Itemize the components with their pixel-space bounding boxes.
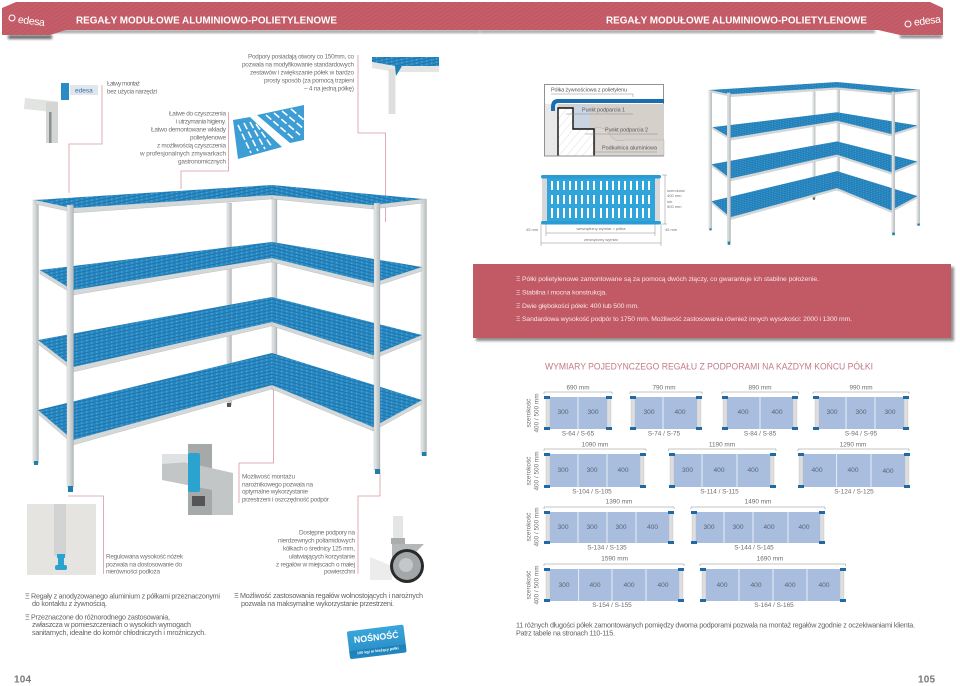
diagram: S-84 / S-85: 890 mm <box>748 385 772 392</box>
bullets: left column 1: Regały z anodyzowanego aluminium z półkami przeznaczonymi <box>31 591 220 600</box>
text: corner mounting: przestrzeni i oszczędność podpór <box>242 497 330 504</box>
text: castors <box>276 530 355 576</box>
photo: large corner shelving unit <box>33 185 426 492</box>
diagram: S-114 / S-115: 300 <box>682 467 693 474</box>
panel: red feature list: Ξ <box>516 303 521 310</box>
diagram: S-134 / S-135: S-134 / S-135 <box>587 545 627 552</box>
shelf level 3 <box>73 322 272 372</box>
axis labels: width: 400 / 500 mm <box>534 507 541 547</box>
header banner: left page <box>2 2 480 39</box>
shelf level 1 <box>72 195 272 213</box>
panel: red feature list: Ξ <box>516 289 521 296</box>
text: castors: nierdzewnych poliamidowych <box>278 538 355 545</box>
text: footnote: Patrz tabele na stronach 110-115. <box>516 628 615 637</box>
page number 105: 105 <box>918 675 935 686</box>
text: castors: kółkach o średnicy 125 mm, <box>283 546 355 553</box>
text: support holes: pozwala na modyfikowanie standardowych <box>242 62 354 69</box>
logo: edesa left: edesa <box>17 14 46 29</box>
diagram: S-164 / S-165 <box>700 556 846 609</box>
text: easy cleaning: i utrzymania higieny. <box>176 119 226 126</box>
plan diagram: shelf dimensions <box>526 175 685 246</box>
diagram: S-74 / S-75: 300 <box>643 409 655 416</box>
text: castors: ułatwiających korzystanie <box>289 554 355 561</box>
diagram: S-94 / S-95: 300 <box>855 409 867 416</box>
axis labels: width: 400 / 500 mm <box>534 393 541 433</box>
axis labels: width: szerokość <box>526 398 533 427</box>
diagram: S-84 / S-85 <box>722 385 798 438</box>
bullets: left column 1: Ξ <box>25 591 30 600</box>
badge: load capacity: 100 kg/ m bieżący półki <box>357 646 399 655</box>
diagram: S-94 / S-95 <box>813 385 909 438</box>
photo: shelf bracket with edesa label: edesa <box>75 88 93 95</box>
axis labels: width: 400 / 500 mm <box>534 451 541 491</box>
panel: red feature list: Półki polietylenowe zamontowane są za pomocą dwóch złączy, co gwarantuje ich stabilne położenie. <box>522 276 819 283</box>
logo: edesa right: edesa <box>913 14 942 29</box>
diagram: S-84 / S-85: 400 <box>737 409 749 416</box>
diagram: S-114 / S-115: 400 <box>713 467 725 474</box>
plan diagram: shelf dimensions: 500 mm <box>667 204 682 209</box>
diagram: S-144 / S-145: 300 <box>703 524 715 531</box>
diagram: S-154 / S-155 <box>544 556 684 609</box>
plan diagram: shelf dimensions: 45 mm <box>665 227 678 232</box>
text: footnote <box>516 620 915 637</box>
text: castors: powierzchni <box>324 569 355 576</box>
photo: small corner shelving unit <box>709 82 920 245</box>
bullets: left column 2 <box>234 591 423 608</box>
page number 104: 104 <box>14 675 31 686</box>
diagram: S-104 / S-105: 300 <box>557 467 569 474</box>
text: support holes: prosty sposób (za pomocą trzpieni <box>264 78 354 85</box>
bullets: left column 1: sanitarnych, idealne do komór chłodniczych i mroźniczych. <box>32 628 206 637</box>
diagram: S-114 / S-115: 400 <box>747 467 759 474</box>
diagram: S-104 / S-105 <box>544 442 646 496</box>
badge: load capacity <box>347 625 407 659</box>
text: adjustable feet: Regulowana wysokość nóżek <box>106 554 184 561</box>
diagram: S-94 / S-95: 300 <box>884 409 896 416</box>
diagram: S-124 / S-125: S-124 / S-125 <box>834 489 874 496</box>
diagram: S-94 / S-95: S-94 / S-95 <box>845 431 878 438</box>
diagram: S-64 / S-65: 690 mm <box>566 385 590 392</box>
text: easy assembly: bez użycia narzędzi <box>107 89 157 96</box>
diagram: S-104 / S-105: S-104 / S-105 <box>572 489 612 496</box>
panel: red feature list <box>473 264 954 341</box>
front posts <box>67 205 74 487</box>
section diagram: shelf fixing <box>544 84 664 156</box>
text: easy assembly: Łatwy montaż <box>107 81 140 88</box>
diagram: S-124 / S-125: 400 <box>847 467 859 474</box>
shelf level 2 <box>73 258 272 295</box>
bullets: left column 1: Ξ <box>25 612 30 621</box>
text: adjustable feet: nierówności podłoża <box>106 569 160 576</box>
badge: load capacity: NOŚNOŚĆ <box>353 629 400 645</box>
diagram: S-154 / S-155: 300 <box>558 582 570 589</box>
diagram: S-64 / S-65: 300 <box>557 409 569 416</box>
diagram: S-74 / S-75: S-74 / S-75 <box>648 431 681 438</box>
diagram: S-124 / S-125: 1290 mm <box>840 442 866 449</box>
panel: red feature list: Ξ <box>516 276 521 283</box>
section diagram: shelf fixing: Punkt podparcia 2 <box>605 127 648 133</box>
diagram: S-164 / S-165: 1690 mm <box>757 556 783 563</box>
diagram: S-164 / S-165: 400 <box>750 582 762 589</box>
diagram: S-144 / S-145: 300 <box>732 524 744 531</box>
panel: red feature list: Stabilna i mocna konstrukcja. <box>522 289 607 296</box>
diagram: S-154 / S-155: 400 <box>657 582 669 589</box>
diagram: S-114 / S-115: 1190 mm <box>709 442 735 449</box>
diagram: S-144 / S-145 <box>691 499 825 552</box>
text: support holes: zestawów i zwiększanie półek w bardzo <box>250 70 354 77</box>
bullets: left column 2: pozwala na maksymalne wykorzystanie przestrzeni. <box>241 599 394 608</box>
text: support holes: Podpory posiadają otwory co 150mm, co <box>248 54 354 61</box>
diagram: S-94 / S-95: 300 <box>826 409 838 416</box>
text: easy cleaning: Łatwo demontowane wkłady <box>151 127 227 134</box>
feet <box>34 461 38 465</box>
axis labels: width <box>526 393 541 605</box>
diagram: S-164 / S-165: 400 <box>716 582 728 589</box>
diagram: S-154 / S-155: 400 <box>589 582 601 589</box>
diagram: S-94 / S-95: 990 mm <box>849 385 873 392</box>
photo: removable polyethylene inserts <box>233 105 304 159</box>
text: footnote: 11 różnych długości półek zamontowanych pomiędzy dwoma podporami pozwala na montaż regałów zgodnie z oczekiwaniami klienta. <box>516 620 915 629</box>
section diagram: shelf fixing: Podkułnica aluminiowa <box>602 145 657 151</box>
photo: castor wheel <box>370 516 424 583</box>
diagram: S-134 / S-135: 300 <box>557 524 569 531</box>
diagram: S-154 / S-155: S-154 / S-155 <box>592 602 632 609</box>
diagram: S-154 / S-155: 1590 mm <box>601 556 628 563</box>
text: easy cleaning: z możliwością czyszczenia <box>157 143 226 150</box>
callout connector lines <box>68 55 386 574</box>
panel: red feature list: Dwie głębokości półek: 400 lub 500 mm. <box>522 303 639 310</box>
diagram: S-114 / S-115 <box>668 442 776 496</box>
diagram: S-144 / S-145: 400 <box>798 524 810 531</box>
diagram: S-134 / S-135: 400 <box>647 524 658 531</box>
diagram: S-74 / S-75: 790 mm <box>652 385 676 392</box>
photo: adjustable foot <box>27 504 96 575</box>
diagram: S-114 / S-115: S-114 / S-115 <box>700 489 739 496</box>
text: easy assembly <box>107 81 157 96</box>
diagram: S-144 / S-145: S-144 / S-145 <box>734 545 774 552</box>
bullets: left column 1: do kontaktu z żywnością. <box>32 599 107 608</box>
text: easy cleaning: Łatwe do czyszczenia <box>169 111 226 118</box>
plan diagram: shelf dimensions: zewnętrzny wymiar <box>584 237 619 242</box>
diagram: S-64 / S-65 <box>544 385 612 438</box>
photo: shelf corner on post <box>372 57 439 114</box>
text: corner mounting: Możliwość montażu <box>242 474 295 481</box>
section diagram: shelf fixing: Punkt podparcia 1 <box>582 107 625 113</box>
text: corner mounting <box>242 474 330 504</box>
text: corner mounting: narożnikowego pozwala na <box>242 482 313 489</box>
diagram: S-154 / S-155: 400 <box>623 582 635 589</box>
text: corner mounting: optymalne wykorzystanie <box>242 489 308 496</box>
text: easy cleaning: w profesjonalnych zmywarkach <box>139 151 226 158</box>
header banner: right page <box>480 2 943 38</box>
diagram: S-74 / S-75 <box>630 385 702 438</box>
text: adjustable feet: pozwala na dostosowanie do <box>106 562 182 569</box>
diagram: S-74 / S-75: 400 <box>674 409 686 416</box>
axis labels: width: szerokość <box>526 570 533 599</box>
diagram: S-124 / S-125 <box>798 442 910 496</box>
diagram: S-104 / S-105: 1090 mm <box>582 442 608 449</box>
diagram: S-134 / S-135: 300 <box>615 524 627 531</box>
diagram: S-144 / S-145: 400 <box>763 524 775 531</box>
header title right: REGAŁY MODUŁOWE ALUMINIOWO-POLIETYLENOWE <box>606 16 867 27</box>
text: easy cleaning <box>139 111 227 166</box>
diagram: S-164 / S-165: S-164 / S-165 <box>754 602 794 609</box>
text: easy cleaning: polietylenowe <box>190 135 226 142</box>
diagram: S-124 / S-125: 400 <box>882 468 894 475</box>
bullets: left column 2: Ξ <box>234 591 239 600</box>
plan diagram: shelf dimensions: wewnętrzny wymiar = półka <box>576 226 626 231</box>
diagram: S-164 / S-165: 400 <box>818 582 830 589</box>
panel: red feature list: Ξ <box>516 316 521 323</box>
text: castors: z regałów w miejscach o małej <box>276 562 355 569</box>
diagram: S-144 / S-145: 1490 mm <box>745 499 771 506</box>
photo: shelf bracket with edesa label <box>24 83 98 143</box>
diagram: S-64 / S-65: 300 <box>587 409 599 416</box>
shelf level 4 <box>73 385 272 445</box>
text: castors: Dostępne podpory na <box>299 530 355 537</box>
bullets: left column 1: Przeznaczone do różnorodnego zastosowania, <box>31 612 170 621</box>
slots <box>551 181 650 218</box>
plan diagram: shelf dimensions: szerokość <box>667 188 685 193</box>
diagram: S-104 / S-105: 300 <box>586 467 598 474</box>
diagram: S-84 / S-85: S-84 / S-85 <box>744 431 777 438</box>
text: support holes: – 4 na jedną półkę) <box>304 86 354 93</box>
photo: corner fitting <box>162 444 233 515</box>
plan diagram: shelf dimensions: 45 mm <box>526 227 539 232</box>
text: easy cleaning: gastronomicznych <box>178 159 226 166</box>
bullets: left column 2: Możliwość zastosowania regałów wolnostojących i narożnych <box>240 591 423 600</box>
diagram: S-84 / S-85: 400 <box>771 409 783 416</box>
text: support holes <box>242 54 354 93</box>
panel: red feature list: Sandardowa wysokość podpór to 1750 mm. Możliwość zastosowania również innych wysokości: 2000 i 1300 mm. <box>522 316 852 323</box>
text: adjustable feet <box>106 554 184 576</box>
axis labels: width: 400 / 500 mm <box>534 565 541 605</box>
plan diagram: shelf dimensions: 400 mm <box>667 193 682 198</box>
axis labels: width: szerokość <box>526 456 533 485</box>
diagram: S-124 / S-125: 400 <box>811 467 823 474</box>
diagram: S-104 / S-105: 400 <box>617 467 629 474</box>
header title left: REGAŁY MODUŁOWE ALUMINIOWO-POLIETYLENOWE <box>76 16 337 27</box>
diagram: S-134 / S-135 <box>544 499 674 552</box>
diagram: S-64 / S-65: S-64 / S-65 <box>562 431 595 438</box>
bullets: left column 1: zwłaszcza w pomieszczeniach o wysokich wymogach <box>32 620 191 629</box>
heading: dimensions: WYMIARY POJEDYNCZEGO REGAŁU Z PODPORAMI NA KAŻDYM KOŃCU PÓŁKI <box>545 362 873 373</box>
blue shelf profile <box>551 99 664 111</box>
section diagram: shelf fixing: Półka żywnościowa z polietylenu <box>551 87 627 93</box>
diagram: S-134 / S-135: 300 <box>586 524 598 531</box>
bullets: left column 1 <box>25 591 220 637</box>
axis labels: width: szerokość <box>526 512 533 541</box>
diagram: S-134 / S-135: 1390 mm <box>606 499 632 506</box>
plan diagram: shelf dimensions: lub <box>667 199 673 204</box>
back posts <box>33 200 38 463</box>
diagram: S-164 / S-165: 400 <box>784 582 796 589</box>
